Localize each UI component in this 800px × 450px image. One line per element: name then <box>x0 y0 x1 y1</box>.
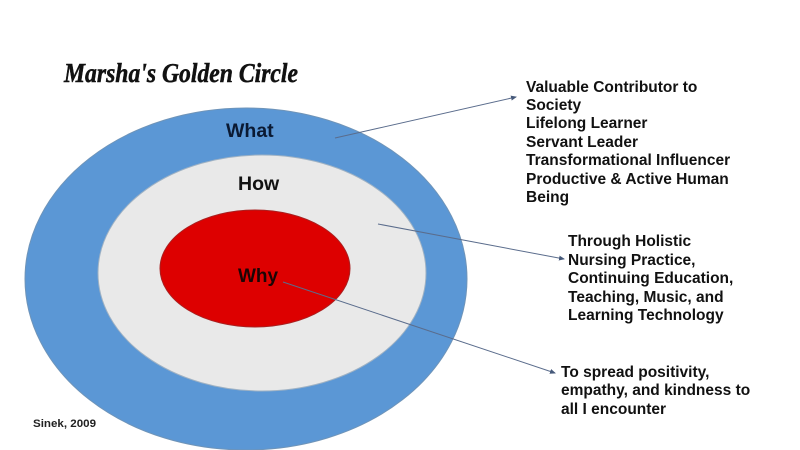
text block: How description: Through Holistic <box>568 233 692 250</box>
text block: What description <box>526 79 730 206</box>
text block: What description: Servant Leader <box>526 134 638 151</box>
outer ring: What <box>25 108 467 450</box>
middle ring: How <box>98 155 426 391</box>
citation: Sinek, 2009 <box>33 418 96 430</box>
arrow: Why to purpose <box>283 282 555 373</box>
text block: How description: Learning Technology <box>568 307 724 324</box>
text block: How description: Nursing Practice, <box>568 252 696 269</box>
text block: What description: Lifelong Learner <box>526 115 647 132</box>
text block: How description <box>568 233 733 324</box>
text block: Why description: empathy, and kindness to <box>561 382 750 399</box>
text block: What description: Transformational Influencer <box>526 152 730 169</box>
text block: Why description: all I encounter <box>561 401 666 418</box>
inner circle: Why <box>160 210 350 327</box>
text block: What description: Productive & Active Human <box>526 171 729 188</box>
text block: What description: Society <box>526 97 582 114</box>
label: What: What <box>226 120 274 142</box>
text block: What description: Being <box>526 189 569 206</box>
arrow: What to outcomes <box>335 97 516 138</box>
text block: What description: Valuable Contributor to <box>526 79 697 96</box>
label: Why: Why <box>238 266 279 287</box>
diagram: nested golden circle <box>25 108 467 450</box>
text block: How description: Teaching, Music, and <box>568 289 724 306</box>
title: Marsha's Golden Circle <box>63 58 298 88</box>
arrow: How to methods <box>378 224 564 259</box>
label: How: How <box>238 173 280 195</box>
text block: Why description: To spread positivity, <box>561 364 709 381</box>
text block: Why description <box>561 364 750 418</box>
text block: How description: Continuing Education, <box>568 270 733 287</box>
